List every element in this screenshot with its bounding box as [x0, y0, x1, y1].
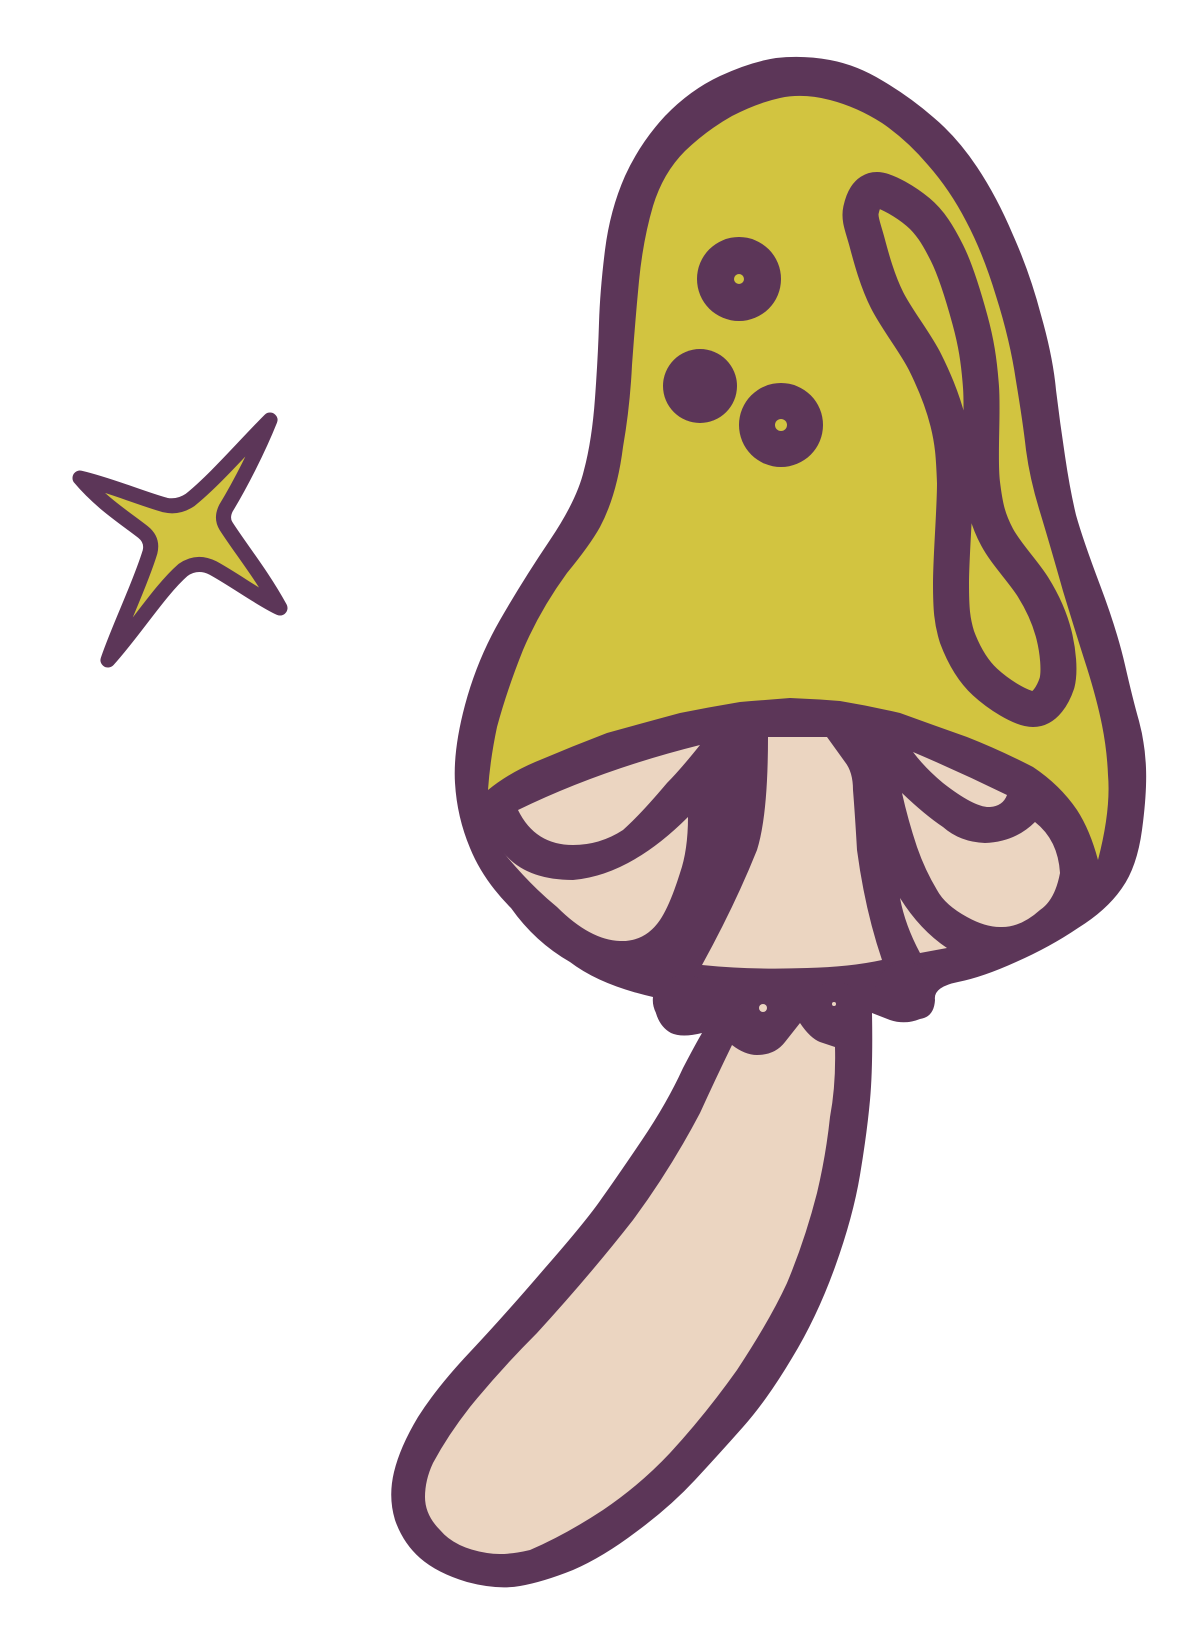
gill: right bottom sliver [900, 898, 947, 953]
cap spot: ring top [697, 237, 781, 321]
gill: right middle [902, 793, 1060, 927]
gill: left lower [503, 817, 688, 941]
mushroom dark silhouette [391, 57, 1146, 1587]
mushroom cap fill [488, 96, 1109, 860]
mushroom frill [655, 962, 935, 1056]
gill: left upper [518, 745, 700, 845]
cap spot: ring bottom [739, 383, 823, 467]
mushroom gills [503, 737, 1060, 969]
frill highlights [759, 1002, 836, 1012]
icon: sparkle star [80, 420, 280, 660]
gill: right top sliver [913, 752, 1007, 807]
cap spot: solid [663, 349, 737, 423]
cap highlight loop [860, 190, 1058, 709]
mushroom stem fill [425, 1023, 835, 1554]
gill: center stem [702, 737, 882, 969]
icon: mushroom [391, 57, 1146, 1587]
